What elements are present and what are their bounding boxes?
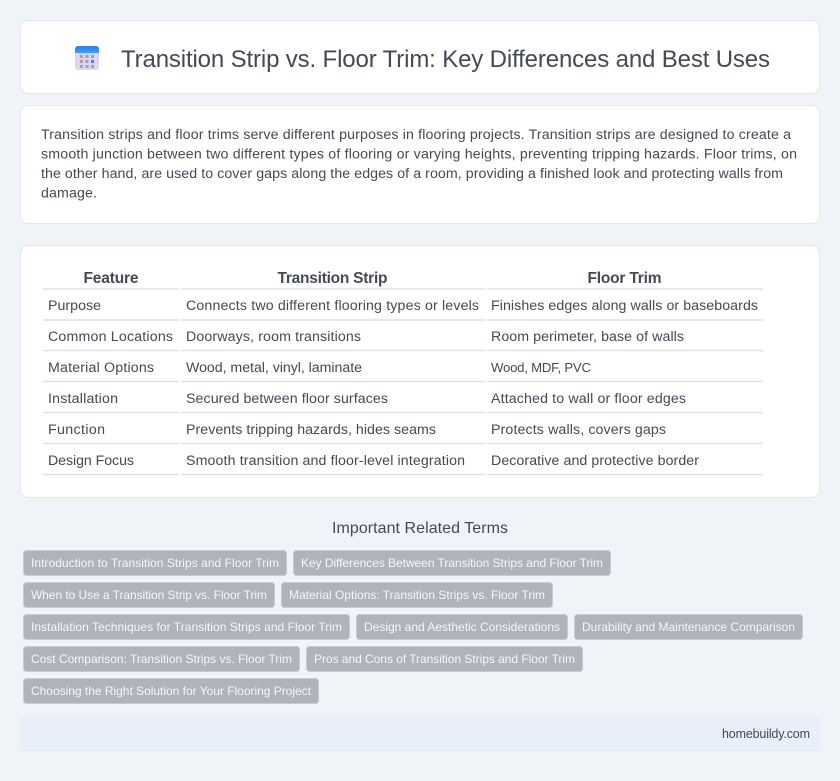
row: material options: Wood, metal, vinyl, laminate — [186, 360, 362, 376]
footer source: homebuildy.com — [722, 727, 810, 741]
chip — [24, 550, 286, 576]
chip: Cost Comparison: Transition Strips vs. Floor Trim — [31, 652, 292, 666]
row: common locations: Common Locations — [48, 329, 173, 345]
header panel — [20, 20, 820, 94]
row: purpose: Purpose — [48, 298, 101, 314]
row: design focus: Design Focus — [48, 453, 134, 469]
heading: important related terms: Important Related Terms — [332, 520, 508, 537]
chip — [24, 614, 350, 640]
table header — [84, 270, 662, 287]
chip: Pros and Cons of Transition Strips and Floor Trim — [314, 652, 575, 666]
chip: When to Use a Transition Strip vs. Floor Trim — [31, 588, 267, 602]
row: common locations: Doorways, room transitions — [186, 329, 361, 345]
chip — [24, 582, 274, 608]
chip: Installation Techniques for Transition Strips and Floor Trim — [31, 620, 342, 634]
intro text: Transition strips and floor trims serve different purposes in flooring projects. Transition strips are designed to create a — [41, 127, 791, 143]
row: installation: Attached to wall or floor edges — [491, 391, 686, 407]
chip — [306, 646, 582, 672]
chip: Key Differences Between Transition Strips and Floor Trim — [301, 556, 603, 570]
row: function: Protects walls, covers gaps — [491, 422, 666, 438]
row: function: Function — [48, 422, 105, 438]
chip: Introduction to Transition Strips and Floor Trim — [31, 556, 279, 570]
row: function: Prevents tripping hazards, hides seams — [186, 422, 436, 438]
chip: Durability and Maintenance Comparison — [582, 620, 795, 634]
icon: calendar — [75, 46, 99, 70]
row: purpose: Finishes edges along walls or baseboards — [491, 298, 758, 314]
table grid lines — [43, 289, 763, 474]
chip — [282, 582, 552, 608]
footer bar — [20, 717, 820, 751]
panel: introduction paragraph — [20, 106, 820, 224]
row: installation — [48, 391, 686, 407]
intro text: smooth junction between two different types of flooring or varying heights, preventing tripping hazards. Floor trims, on — [41, 146, 797, 162]
row: purpose — [48, 298, 758, 314]
row: material options: Material Options — [48, 360, 154, 376]
chip: Choosing the Right Solution for Your Flooring Project — [31, 684, 312, 698]
row: design focus: Smooth transition and floor-level integration — [186, 453, 465, 469]
table header: Transition Strip — [278, 270, 388, 287]
row: purpose: Connects two different flooring types or levels — [186, 298, 479, 314]
row: common locations — [48, 329, 684, 345]
row: function — [48, 422, 666, 438]
intro text: the other hand, are used to cover gaps along the edges of a room, providing a finished look and protecting walls from — [41, 166, 783, 182]
row: design focus: Decorative and protective border — [491, 453, 699, 469]
chip — [294, 550, 610, 576]
row: common locations: Room perimeter, base of walls — [491, 329, 684, 345]
chip: Material Options: Transition Strips vs. Floor Trim — [289, 588, 545, 602]
row: material options: Wood, MDF, PVC — [491, 360, 591, 375]
intro text: damage. — [41, 186, 97, 202]
row: material options — [48, 360, 591, 376]
title: Transition Strip vs. Floor Trim: Key Differences and Best Uses — [121, 46, 770, 73]
chip — [24, 678, 318, 704]
table header: Floor Trim — [588, 270, 662, 287]
row: installation: Secured between floor surfaces — [186, 391, 388, 407]
panel: comparison table — [20, 246, 820, 498]
related term chips — [24, 550, 802, 704]
chip — [574, 614, 802, 640]
row: design focus — [48, 453, 699, 469]
table header: Feature — [84, 270, 139, 287]
chip — [24, 646, 300, 672]
chip: Design and Aesthetic Considerations — [364, 620, 560, 634]
row: installation: Installation — [48, 391, 118, 407]
chip — [356, 614, 568, 640]
